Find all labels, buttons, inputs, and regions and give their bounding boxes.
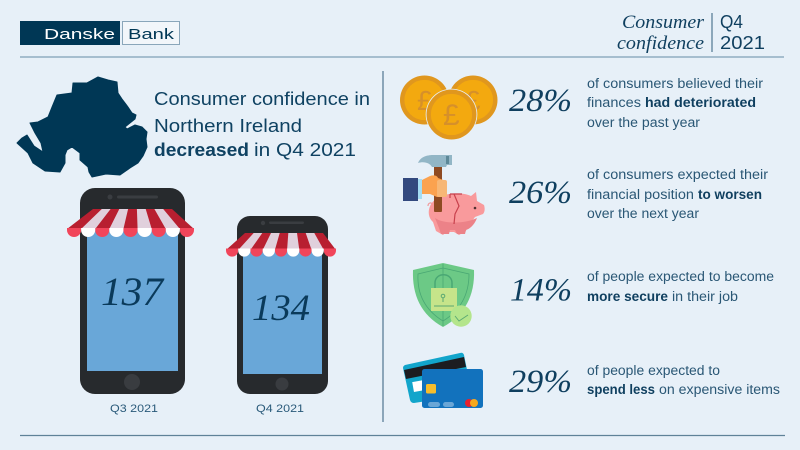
text: 28% description: over the past year xyxy=(587,115,701,130)
phone: Q4 2021 value 134 xyxy=(226,216,336,394)
icon: hammer and piggy bank xyxy=(403,155,485,235)
icon: Northern Ireland map xyxy=(17,77,147,177)
text: 26% description: financial position xyxy=(587,187,694,202)
text: 29% description xyxy=(587,363,780,397)
text: 14% description xyxy=(587,269,774,304)
text: 28% description: finances xyxy=(587,95,641,110)
text: 29% description: spend less xyxy=(587,382,655,397)
header label: Consumer confidence Q4 2021: Consumer xyxy=(622,12,705,33)
text: 26% description: over the next year xyxy=(587,206,700,221)
logo: Danske Bank: Danske xyxy=(44,26,115,43)
phone: Q3 2021 value 137: 137 xyxy=(101,269,165,314)
logo: Danske Bank: Bank xyxy=(128,26,175,43)
icon: pound coins: £ xyxy=(417,85,433,116)
text: 14% description: of people expected to become xyxy=(587,269,774,284)
phone: Q3 2021 value 137 xyxy=(67,188,194,394)
header label: Consumer confidence Q4 2021: 2021 xyxy=(720,33,765,53)
header label: Consumer confidence Q4 2021: Q4 xyxy=(720,12,743,32)
text: 28% description: of consumers believed their xyxy=(587,76,764,91)
text: 28% description xyxy=(587,76,764,130)
awning: Q4 shop xyxy=(226,233,336,257)
title: Consumer confidence in Northern Ireland decreased in Q4 2021: Consumer confidence in xyxy=(154,88,370,109)
logo: Danske Bank xyxy=(20,21,180,45)
label: Q4 2021: Q4 2021 xyxy=(256,403,304,415)
text: 29% description: of people expected to xyxy=(587,363,720,378)
phone: Q4 2021 value 134: 134 xyxy=(252,288,310,329)
text: 26% description: to worsen xyxy=(698,187,762,202)
text: 28% description: had deteriorated xyxy=(645,95,756,110)
title: Consumer confidence in Northern Ireland decreased in Q4 2021 xyxy=(154,88,370,160)
header label: Consumer confidence Q4 2021: confidence xyxy=(617,33,704,54)
title: Consumer confidence in Northern Ireland decreased in Q4 2021: in Q4 2021 xyxy=(254,139,356,160)
icon: pound coins: £ xyxy=(443,99,460,132)
stat: 29%: 29% xyxy=(509,364,572,400)
stat: 26%: 26% xyxy=(509,175,572,211)
stat: 14%: 14% xyxy=(510,272,572,308)
icon: credit cards xyxy=(403,353,483,408)
text: 14% description: more secure xyxy=(587,289,668,304)
text: 14% description: in their job xyxy=(672,289,738,304)
header label: Consumer confidence Q4 2021 xyxy=(617,12,765,54)
icon: pound coins: £ xyxy=(465,85,481,116)
stat: 28%: 28% xyxy=(509,83,572,119)
title: Consumer confidence in Northern Ireland decreased in Q4 2021: decreased xyxy=(154,139,249,160)
title: Consumer confidence in Northern Ireland decreased in Q4 2021: Northern Ireland xyxy=(154,115,302,136)
text: 26% description xyxy=(587,167,769,221)
awning: Q3 shop xyxy=(67,209,194,237)
text: 29% description: on expensive items xyxy=(659,382,780,397)
label: Q3 2021: Q3 2021 xyxy=(110,403,158,415)
text: 26% description: of consumers expected their xyxy=(587,167,769,182)
icon: security shield xyxy=(413,263,474,327)
icon: pound coins xyxy=(400,76,498,140)
